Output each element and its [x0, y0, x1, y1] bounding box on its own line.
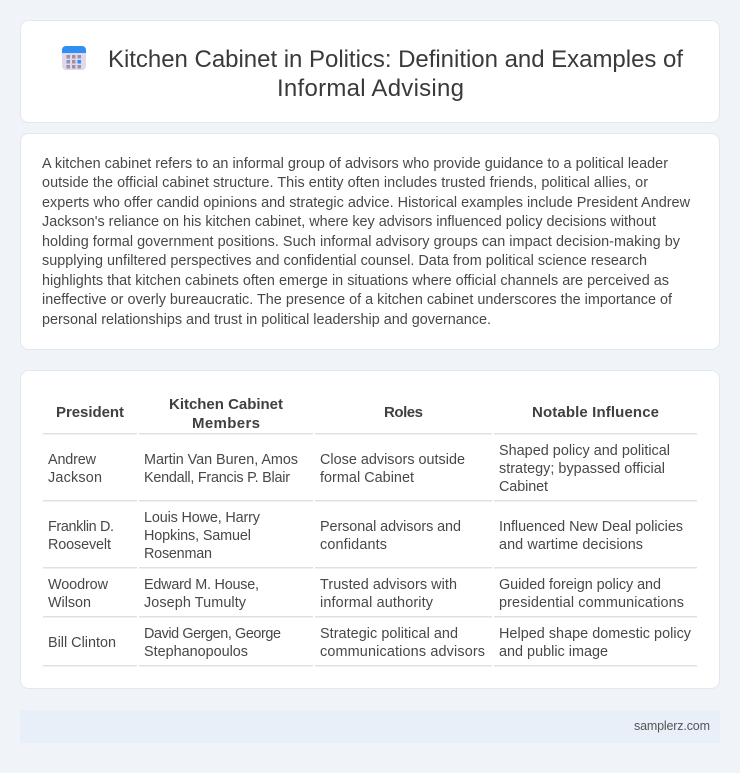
table row: Franklin D. Roosevelt: confidants — [320, 537, 387, 553]
icon: calendar — [62, 46, 86, 70]
table row: Bill Clinton: Strategic political and — [320, 626, 458, 642]
footer: samplerz.com — [634, 719, 710, 733]
table row: Andrew Jackson: Martin Van Buren, Amos — [144, 452, 298, 468]
table row: Woodrow Wilson — [48, 577, 684, 611]
text block: description paragraph: personal relationships and trust in political leadership and governance. — [42, 312, 491, 328]
table row: Andrew Jackson: formal Cabinet — [320, 470, 414, 486]
text block: description paragraph: ineffective or overly bureaucratic. The presence of a kitchen cabinet underscores the importance of — [42, 292, 673, 308]
table row: Woodrow Wilson: Woodrow — [48, 577, 109, 593]
table header — [56, 396, 659, 432]
table row: Franklin D. Roosevelt: Roosevelt — [48, 537, 111, 553]
table row: Bill Clinton: and public image — [499, 644, 608, 660]
text block: description paragraph: supplying unfiltered perspectives and confidential counsel. Data from political science research — [42, 253, 647, 269]
table row: Bill Clinton: David Gergen, George — [144, 626, 281, 642]
panel: description — [20, 134, 720, 350]
text block: description paragraph: Jackson's reliance on his kitchen cabinet, where key advisors influenced policy decisions without — [42, 214, 656, 230]
table row: Franklin D. Roosevelt: Hopkins, Samuel — [144, 528, 251, 544]
text block: description paragraph: highlights that kitchen cabinets often emerge in situations where official channels are perceived as — [42, 273, 669, 289]
text block: description paragraph: outside the official cabinet structure. This entity often includes trusted friends, political allies, or — [42, 175, 648, 191]
table row: Franklin D. Roosevelt: Louis Howe, Harry — [144, 510, 261, 526]
table header: President — [56, 404, 124, 421]
table row: Woodrow Wilson: Edward M. House, — [144, 577, 259, 593]
table header: Notable Influence — [532, 404, 659, 421]
table row: Bill Clinton — [48, 626, 692, 660]
table row: Andrew Jackson — [48, 443, 670, 495]
table row: Bill Clinton: Stephanopoulos — [144, 644, 248, 660]
table header: Roles — [384, 404, 423, 421]
footer — [20, 710, 720, 743]
table row: Bill Clinton: Bill Clinton — [48, 635, 116, 651]
table row: Franklin D. Roosevelt: Influenced New Deal policies — [499, 519, 683, 535]
table row: Bill Clinton: communications advisors — [320, 644, 485, 660]
table row: Andrew Jackson: strategy; bypassed official — [499, 461, 665, 477]
title: Informal Advising — [277, 75, 464, 102]
panel: title card — [20, 20, 720, 122]
table row: Andrew Jackson: Jackson — [48, 470, 102, 486]
title: Kitchen Cabinet in Politics: Definition and Examples of — [108, 46, 683, 73]
table header: Kitchen Cabinet — [169, 396, 283, 413]
table row: Franklin D. Roosevelt: Franklin D. — [48, 519, 114, 535]
table header: Members — [192, 415, 260, 432]
table row: Woodrow Wilson: Trusted advisors with — [320, 577, 457, 593]
table row: Franklin D. Roosevelt: Rosenman — [144, 546, 212, 562]
table row: Franklin D. Roosevelt: and wartime decisions — [499, 537, 643, 553]
text block: description paragraph: experts who offer candid opinions and strategic advice. Historical examples include President Andrew — [42, 195, 691, 211]
table row: Andrew Jackson: Cabinet — [499, 479, 548, 495]
table row: Bill Clinton: Helped shape domestic policy — [499, 626, 692, 642]
table row: Woodrow Wilson: Joseph Tumulty — [144, 595, 247, 611]
table row: Woodrow Wilson: informal authority — [320, 595, 434, 611]
title — [108, 46, 683, 102]
table row: Franklin D. Roosevelt — [48, 510, 683, 562]
table row: Woodrow Wilson: presidential communications — [499, 595, 684, 611]
text block: description paragraph — [42, 156, 691, 328]
table row: Woodrow Wilson: Wilson — [48, 595, 91, 611]
table row: Woodrow Wilson: Guided foreign policy and — [499, 577, 661, 593]
table row: Andrew Jackson: Kendall, Francis P. Blair — [144, 470, 290, 486]
text block: description paragraph: holding formal government positions. Such informal advisory groups can impact decision-making by — [42, 234, 681, 250]
panel: table — [20, 370, 720, 688]
text block: description paragraph: A kitchen cabinet refers to an informal group of advisors who provide guidance to a political leader — [42, 156, 668, 172]
table row: Andrew Jackson: Close advisors outside — [320, 452, 465, 468]
table row: Franklin D. Roosevelt: Personal advisors and — [320, 519, 461, 535]
table row: Andrew Jackson: Shaped policy and political — [499, 443, 670, 459]
table row: Andrew Jackson: Andrew — [48, 452, 97, 468]
